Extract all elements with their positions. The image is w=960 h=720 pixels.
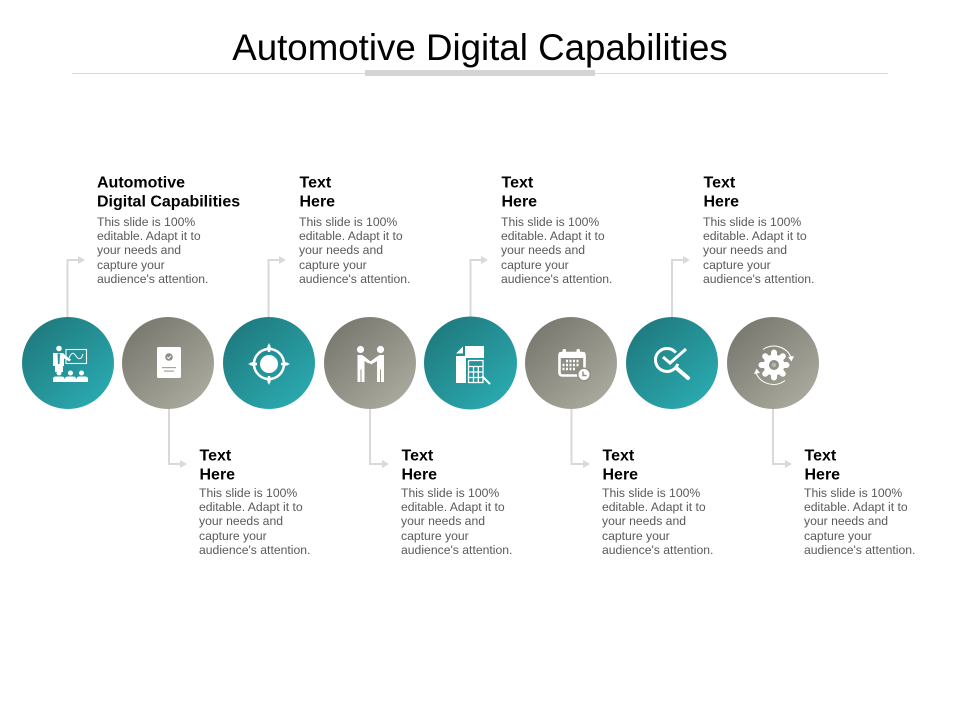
item 3: top text block: Text [300,174,332,192]
circle 3 [223,317,315,409]
item 7: top text block: your needs and [703,243,787,257]
item 2: bottom text block: capture your [199,529,267,543]
title underline [72,70,888,76]
item 8: bottom text block [804,448,915,557]
item 3: top text block: capture your [299,258,367,272]
item 6: bottom text block [602,448,713,557]
item 5: top text block: Here [502,194,537,210]
item 5: top text block [501,174,612,286]
circle 5 [424,316,517,410]
item 6: bottom text block: audience's attention. [602,543,713,557]
item 7: top text block: audience's attention. [703,272,814,286]
item 4: bottom text block [401,448,512,557]
item 6: bottom text block: your needs and [602,514,686,528]
item 4: bottom text block: audience's attention. [401,543,512,557]
item 1: top text block: Digital Capabilities [97,194,240,210]
item 7: top text block: This slide is 100% [703,215,801,229]
item 1: top text block: audience's attention. [97,272,208,286]
item 1: top text block: editable. Adapt it to [97,229,201,243]
item 7: top text block: Here [704,194,739,210]
item 4: bottom text block: your needs and [401,514,485,528]
item 2: bottom text block: your needs and [199,514,283,528]
item 8: bottom text block: This slide is 100% [804,486,902,500]
circle 2 [122,317,214,409]
item 8: bottom text block: capture your [804,529,872,543]
item 1: top text block: This slide is 100% [97,215,195,229]
item 8: bottom text block: editable. Adapt it to [804,500,908,514]
item 7: top text block: capture your [703,258,771,272]
item 5: top text block: Text [502,174,534,192]
item 3: top text block: Here [300,194,335,210]
icon: handshake [357,346,384,382]
icon: documents with calculator [456,346,490,384]
item 5: top text block: your needs and [501,243,585,257]
circle 4 [324,317,416,409]
item 2: bottom text block: editable. Adapt it to [199,500,303,514]
item 4: bottom text block: Text [402,448,434,464]
item 2: bottom text block: Here [200,466,235,484]
item 5: top text block: capture your [501,258,569,272]
arrow 7 [672,256,690,318]
item 2: bottom text block: Text [200,448,232,464]
item 4: bottom text block: Here [402,466,437,484]
item 1: top text block [97,174,240,286]
item 5: top text block: This slide is 100% [501,215,599,229]
item 2: bottom text block: audience's attention. [199,543,310,557]
icon: document with check badge [157,347,181,378]
arrow 1 [68,256,85,318]
item 2: bottom text block [199,448,310,557]
item 7: top text block [703,174,814,286]
item 6: bottom text block: capture your [602,529,670,543]
item 5: top text block: audience's attention. [501,272,612,286]
item 6: bottom text block: This slide is 100% [602,486,700,500]
icon: gear with cycle arrows [754,346,794,384]
arrow 6 [572,408,590,468]
arrow 3 [268,256,286,318]
icon: calendar with clock [558,349,591,382]
item 4: bottom text block: This slide is 100% [401,486,499,500]
item 8: bottom text block: Text [804,448,837,464]
item 3: top text block: This slide is 100% [299,215,397,229]
arrow 8 [773,408,792,468]
item 8: bottom text block: your needs and [804,514,888,528]
item 4: bottom text block: capture your [401,529,469,543]
item 6: bottom text block: Text [602,448,635,464]
arrow 5 [470,256,488,318]
item 1: top text block: your needs and [97,243,181,257]
item 3: top text block: your needs and [299,243,383,257]
item 8: bottom text block: Here [804,466,840,484]
item 2: bottom text block: This slide is 100% [199,486,297,500]
item 3: top text block: editable. Adapt it to [299,229,403,243]
icon: presenter with chart board and audience [53,346,88,382]
item 4: bottom text block: editable. Adapt it to [401,500,505,514]
circle 6 [525,317,617,409]
icon: target crosshair [248,343,290,385]
item 1: top text block: Automotive [97,174,185,192]
item 3: top text block: audience's attention. [299,272,410,286]
circle 7 [626,317,718,409]
circle 1 [22,317,114,409]
item 6: bottom text block: Here [602,466,638,484]
item 6: bottom text block: editable. Adapt it to [602,500,706,514]
circle 8 [727,317,819,409]
title: Automotive Digital Capabilities [232,27,728,68]
item 7: top text block: editable. Adapt it to [703,229,807,243]
arrow 2 [169,408,187,468]
item 3: top text block [299,174,410,286]
arrow 4 [370,408,389,468]
item 5: top text block: editable. Adapt it to [501,229,605,243]
icon: magnifier with check [655,348,688,378]
item 7: top text block: Text [704,174,736,192]
item 8: bottom text block: audience's attention. [804,543,915,557]
item 1: top text block: capture your [97,258,165,272]
